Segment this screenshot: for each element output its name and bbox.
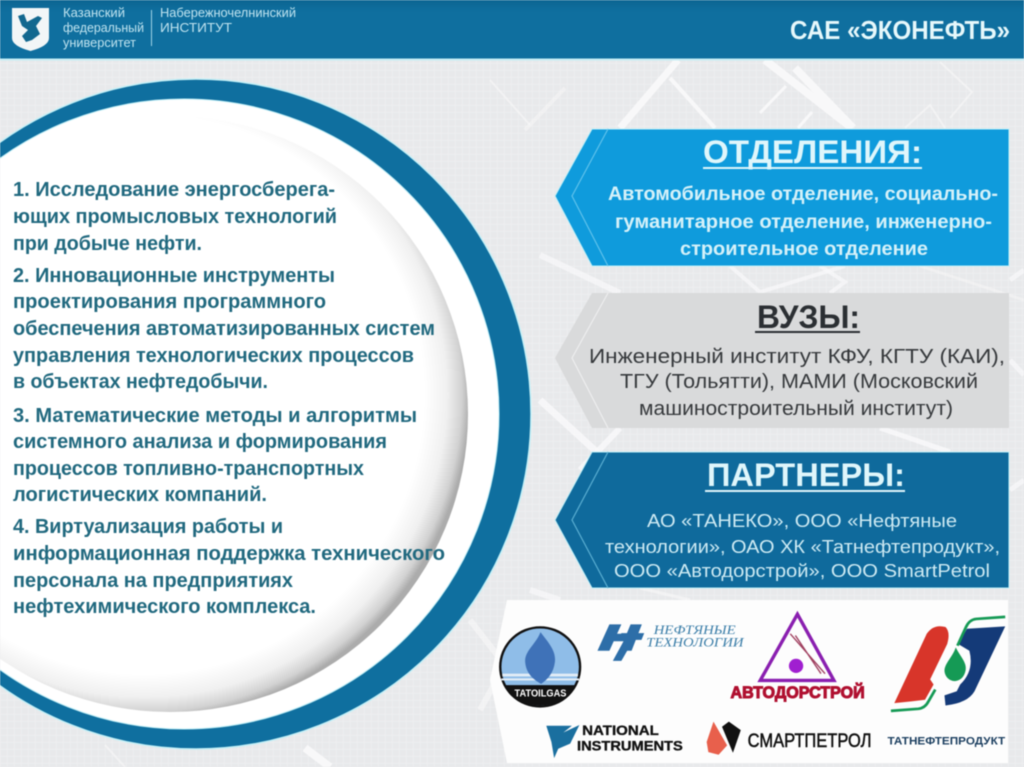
logo: Avtodorstroy: АВТОДОРСТРОЙ	[731, 683, 865, 702]
body text: ООО «Автодорстрой», ООО SmartPetrol	[614, 560, 990, 581]
body text: Автомобильное отделение, социально-	[608, 183, 998, 205]
research topics list: логистических компаний.	[13, 484, 267, 506]
header bar	[0, 0, 1024, 60]
institute name	[160, 5, 296, 35]
white shaded disc	[0, 116, 468, 712]
body text	[589, 346, 1005, 420]
body text: гуманитарное отделение, инженерно-	[615, 211, 992, 233]
institute name: Набережночелнинский	[160, 5, 296, 20]
logo: National Instruments	[546, 723, 683, 758]
body text: ТГУ (Тольятти), МАМИ (Московский	[620, 371, 978, 393]
research topics list: в объектах нефтедобычи.	[13, 371, 268, 393]
institute name: ИНСТИТУТ	[160, 20, 232, 35]
body text: строительное отделение	[680, 238, 928, 260]
white inner ring	[0, 99, 499, 729]
logo: Avtodorstroy	[731, 614, 865, 702]
research topics list: при добыче нефти.	[13, 233, 202, 255]
research topics list: информационная поддержка технического	[13, 543, 445, 565]
logo: Neftyanye Tekhnologii: ТЕХНОЛОГИИ	[646, 636, 744, 650]
logo: Smartpetrol	[707, 722, 871, 755]
research topics list: 4. Виртуализация работы и	[13, 516, 283, 538]
research topics list: персонала на предприятиях	[13, 570, 293, 592]
research topics list: 3. Математические методы и алгоритмы	[13, 405, 417, 427]
university name: федеральный	[63, 20, 144, 35]
body text: Инженерный институт КФУ, КГТУ (КАИ),	[589, 346, 1005, 368]
university name: университет	[63, 35, 136, 50]
body text: АО «ТАНЕКО», ООО «Нефтяные	[647, 510, 957, 531]
icon: KFU shield logo	[12, 8, 49, 51]
panel: partners	[555, 452, 1009, 588]
research topics list	[13, 179, 445, 618]
research topics list: обеспечения автоматизированных систем	[13, 318, 435, 340]
panel: research circle	[0, 79, 531, 749]
logo: National Instruments: INSTRUMENTS	[577, 738, 683, 754]
research topics list: 2. Инновационные инструменты	[13, 265, 335, 287]
blue ring	[0, 79, 531, 749]
panel: partner logos	[490, 600, 1008, 763]
logo: Tatoilgas	[500, 627, 580, 706]
research topics list: проектирования программного	[13, 291, 326, 313]
body text: технологии», ОАО ХК «Татнефтепродукт»,	[605, 536, 1000, 557]
panel: universities	[555, 293, 1009, 428]
body text: машиностроительный институт)	[639, 398, 953, 420]
logo: National Instruments: NATIONAL	[582, 723, 659, 739]
panel: departments	[555, 129, 1009, 266]
university name: Казанский	[63, 5, 125, 20]
research topics list: управления технологических процессов	[13, 345, 414, 367]
title: САЕ «ЭКОНЕФТЬ»	[790, 15, 1010, 45]
logo: Neftyanye Tekhnologii	[597, 623, 744, 661]
university name	[63, 5, 144, 50]
body text	[605, 510, 1000, 581]
heading: ВУЗЫ:	[757, 299, 860, 335]
logo text: Tatnefteprodukt: ТАТНЕФТЕПРОДУКТ	[887, 736, 1006, 748]
logo: Tatoilgas: TATOILGAS	[515, 688, 567, 699]
logo: Smartpetrol: СМАРТПЕТРОЛ	[748, 730, 871, 752]
research topics list: ющих промысловых технологий	[13, 206, 337, 228]
research topics list: нефтехимического комплекса.	[13, 596, 316, 618]
logo: Tatnefteprodukt	[891, 617, 1005, 711]
heading: ОТДЕЛЕНИЯ:	[703, 134, 922, 170]
research topics list: процессов топливно-транспортных	[13, 458, 364, 480]
logo: Neftyanye Tekhnologii: НЕФТЯНЫЕ	[653, 623, 736, 637]
research topics list: 1. Исследование энергосберега-	[13, 179, 335, 201]
body text	[608, 183, 998, 260]
research topics list: системного анализа и формирования	[13, 431, 387, 453]
heading: ПАРТНЕРЫ:	[707, 457, 905, 493]
